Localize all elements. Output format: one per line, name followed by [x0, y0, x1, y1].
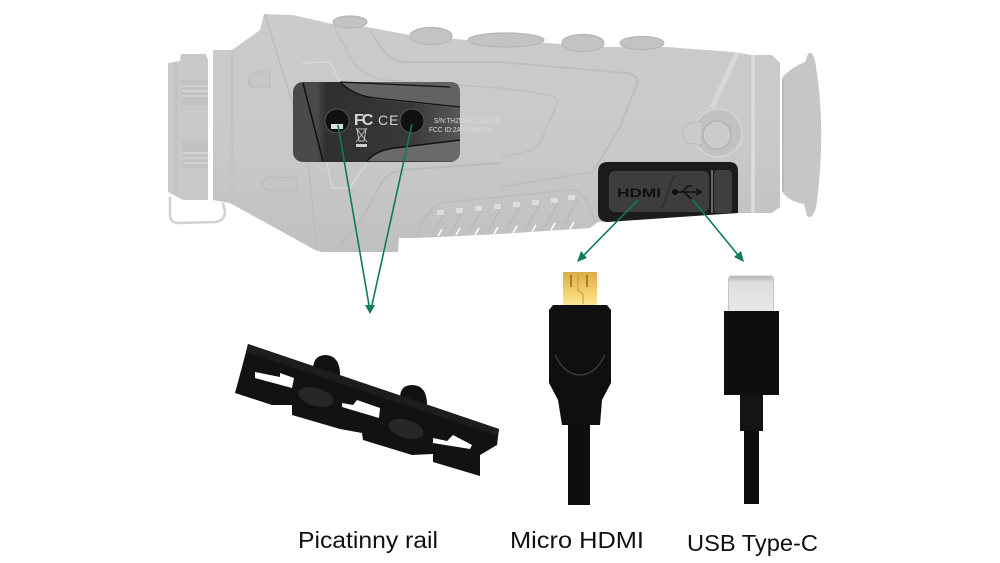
- picatinny rail: [235, 344, 499, 476]
- label: Picatinny rail: Picatinny rail: [298, 527, 438, 553]
- gold plug: [563, 272, 597, 305]
- label: Micro HDMI: Micro HDMI: [510, 527, 644, 553]
- picatinny mount highlight panel: [293, 82, 500, 162]
- lanyard loop: [170, 197, 225, 223]
- body contour shading: [232, 15, 753, 250]
- thermal monocular device: [168, 14, 821, 252]
- port cover highlight panel: [598, 162, 738, 222]
- rail screws: [313, 355, 340, 378]
- rail slots: [255, 372, 472, 449]
- USB Type-C connector: [724, 276, 779, 504]
- grip ridges: [417, 190, 596, 236]
- cable: [744, 431, 759, 504]
- micro HDMI connector: [549, 272, 611, 505]
- certification marks: [354, 112, 399, 147]
- arrow: rail holes to rail: [338, 124, 412, 314]
- serial text: FCC ID:2AKUSH02B: [429, 127, 491, 134]
- cable: [568, 425, 590, 505]
- objective lens ring: [168, 54, 208, 200]
- mounting hole right: [400, 109, 424, 133]
- moulded boot: [549, 305, 611, 425]
- arrow: to micro HDMI: [577, 200, 638, 262]
- serial text: [429, 118, 500, 134]
- strain relief: [740, 395, 763, 431]
- steel plug: [728, 276, 774, 312]
- focus knob: [683, 109, 742, 157]
- serial text: S/N:TH250AYL04101C: [434, 118, 500, 125]
- mounting hole left: [325, 109, 349, 133]
- HDMI label: HDMI: [617, 186, 661, 200]
- rail body: [235, 344, 499, 476]
- boot: [724, 311, 779, 395]
- top buttons: [333, 16, 664, 52]
- side studs: [248, 72, 297, 190]
- label: USB Type-C: USB Type-C: [687, 530, 818, 556]
- USB symbol: [673, 186, 701, 198]
- eyecup: [782, 53, 821, 217]
- certification marks: CE: [378, 112, 399, 128]
- certification marks: FC: [354, 112, 374, 129]
- arrow: to USB Type-C: [693, 200, 744, 262]
- main body: [213, 14, 780, 252]
